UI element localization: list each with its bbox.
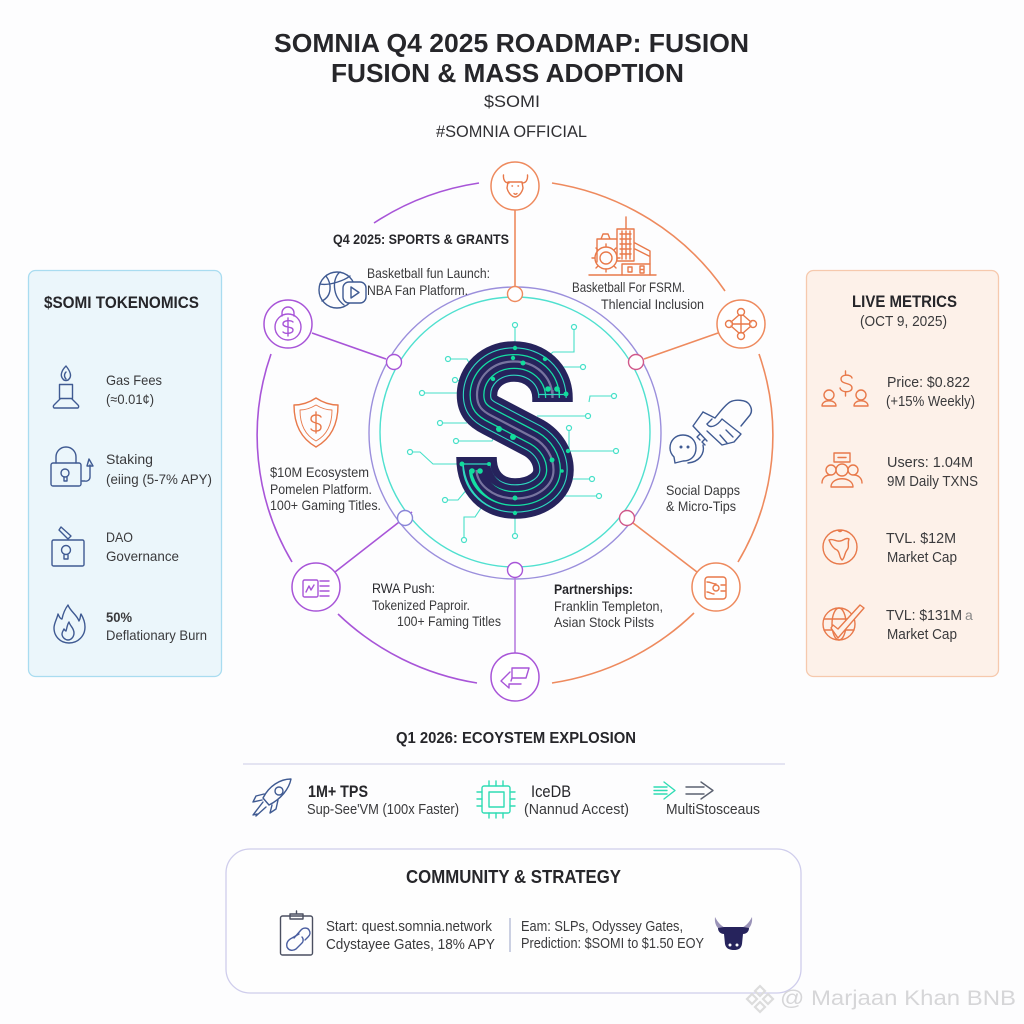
text: tvl: Market Cap bbox=[887, 549, 957, 566]
icon: users bbox=[822, 453, 862, 487]
text: ecosystem grant bbox=[270, 464, 381, 513]
icon: factory building bbox=[589, 217, 656, 275]
heading: q4 2025: Q4 2025: SPORTS & GRANTS bbox=[333, 231, 509, 247]
title: SOMNIA Q4 2025 ROADMAP: FUSION bbox=[274, 28, 749, 58]
central S logo with circuit traces bbox=[408, 322, 618, 542]
hub nodes bbox=[386, 286, 644, 578]
text: social dapps: & Micro-Tips bbox=[666, 498, 736, 514]
icon: teal arrow bbox=[654, 782, 675, 799]
connectors bbox=[312, 210, 718, 653]
title bbox=[274, 28, 749, 88]
node: server bbox=[692, 563, 740, 611]
circuit nodes bbox=[460, 346, 570, 515]
text: burn: 50% bbox=[106, 609, 133, 625]
text: price bbox=[886, 374, 975, 410]
inner hub ring bbox=[380, 297, 650, 567]
circuit pins bbox=[408, 322, 618, 542]
text: start: Start: quest.somnia.network bbox=[326, 918, 492, 935]
text: dao bbox=[106, 529, 179, 564]
text: ecosystem grant: Pomelen Platform. bbox=[270, 481, 372, 497]
text: basketball launch bbox=[367, 265, 490, 298]
icon: globe with check bbox=[823, 605, 864, 640]
text: earn: Eam: SLPs, Odyssey Gates, bbox=[521, 918, 683, 935]
node: arrow flag bbox=[491, 653, 539, 701]
watermark: @ Marjaan Khan BNB bbox=[780, 987, 1016, 1010]
text: multistream: MultiStosceaus bbox=[666, 801, 760, 818]
outer orbit arcs bbox=[257, 183, 773, 683]
node: bull bbox=[491, 162, 539, 210]
icon: globe bbox=[823, 530, 857, 564]
S shape bbox=[462, 362, 566, 498]
watermark bbox=[747, 986, 1016, 1012]
text: gas fees bbox=[106, 372, 162, 407]
text: ecosystem grant: 100+ Gaming Titles. bbox=[270, 497, 381, 513]
icon: gray arrow bbox=[686, 782, 713, 799]
text: burn: Deflationary Burn bbox=[106, 627, 207, 643]
text: rwa push: Tokenized Paproir. bbox=[372, 597, 470, 613]
divider bbox=[509, 918, 511, 952]
icon: gas burner bbox=[53, 366, 79, 408]
text: rwa push: 100+ Faming Titles bbox=[397, 613, 501, 629]
text: dao: DAO bbox=[106, 529, 133, 545]
text: icedb: (Nannud Accest) bbox=[524, 801, 629, 818]
icon: basketball with play bbox=[319, 272, 366, 308]
text: earn: Prediction: $SOMI to $1.50 EOY bbox=[521, 935, 704, 952]
icon: handshake and chat bbox=[670, 400, 751, 463]
text: price: (+15% Weekly) bbox=[886, 393, 975, 410]
heading: tokenomics: $SOMI TOKENOMICS bbox=[44, 293, 199, 312]
text: price: Price: $0.822 bbox=[887, 374, 970, 391]
heading: community: COMMUNITY & STRATEGY bbox=[406, 867, 621, 887]
text: tps: Sup-See'VM (100x Faster) bbox=[307, 801, 459, 818]
text: rwa push bbox=[372, 580, 501, 629]
text: staking: Staking bbox=[106, 451, 153, 467]
text: ecosystem grant: $10M Ecosystem bbox=[270, 464, 369, 480]
text: social dapps bbox=[666, 482, 740, 514]
hashtag subtitle: #SOMNIA OFFICIAL bbox=[436, 122, 587, 141]
icon: chip bbox=[477, 781, 515, 818]
text: basketball launch: NBA Fan Platform. bbox=[367, 282, 468, 298]
text: tvl bbox=[886, 530, 957, 566]
panel: live metrics bbox=[806, 270, 998, 676]
ticker subtitle: $SOMI bbox=[484, 92, 540, 111]
text: fsrm: Thlencial Inclusion bbox=[601, 296, 704, 312]
icon: shield bbox=[294, 398, 338, 447]
text: market cap: Market Cap bbox=[887, 626, 957, 643]
text: gas fees: Gas Fees bbox=[106, 372, 162, 388]
text: fsrm: Basketball For FSRM. bbox=[572, 279, 685, 295]
text: staking: (eiing (5-7% APY) bbox=[106, 471, 212, 487]
text: start: Cdystayee Gates, 18% APY bbox=[326, 936, 495, 953]
text: dao: Governance bbox=[106, 548, 179, 564]
text: market cap bbox=[886, 607, 973, 643]
text: partnerships: Asian Stock Pilsts bbox=[554, 614, 654, 630]
text: tvl: TVL. $12M bbox=[886, 530, 956, 547]
heading: live metrics: LIVE METRICS bbox=[852, 292, 957, 311]
icon: price people bbox=[822, 371, 868, 406]
text: market cap: TVL: $131M bbox=[886, 607, 962, 624]
text: start bbox=[326, 918, 495, 953]
panel: community and strategy bbox=[226, 849, 801, 993]
divider bbox=[243, 763, 785, 765]
text: icedb bbox=[524, 782, 629, 818]
text: tps bbox=[307, 782, 459, 818]
text: gas fees: (≈0.01¢) bbox=[106, 391, 154, 407]
text: basketball launch: Basketball fun Launch: bbox=[367, 265, 490, 281]
heading: live metrics bbox=[852, 292, 957, 330]
icon: dao ballot bbox=[52, 527, 84, 566]
text: partnerships: Franklin Templeton, bbox=[554, 598, 663, 614]
text: rwa push: RWA Push: bbox=[372, 580, 435, 596]
text: tps: 1M+ TPS bbox=[308, 782, 368, 801]
heading: q1 2026: Q1 2026: ECOYSTEM EXPLOSION bbox=[396, 730, 636, 747]
text: users bbox=[887, 454, 978, 490]
text: earn bbox=[521, 918, 704, 952]
node: lock bbox=[264, 300, 312, 348]
title: FUSION & MASS ADOPTION bbox=[331, 58, 684, 88]
text: fsrm bbox=[572, 279, 704, 312]
text: market cap: a bbox=[965, 607, 973, 623]
outer hub ring bbox=[369, 287, 661, 579]
text: partnerships bbox=[554, 581, 663, 630]
icon: staking lock bbox=[51, 447, 93, 486]
text: partnerships: Partnerships: bbox=[554, 581, 633, 597]
icon: flame bbox=[54, 605, 85, 643]
icon: bull head bbox=[715, 917, 752, 950]
text: users: 9M Daily TXNS bbox=[887, 473, 978, 490]
text: icedb: IceDB bbox=[531, 782, 571, 801]
panel: tokenomics bbox=[28, 270, 222, 676]
text: social dapps: Social Dapps bbox=[666, 482, 740, 498]
node: document chart bbox=[292, 563, 340, 611]
icon: rocket bbox=[253, 779, 291, 816]
icon: clipboard link bbox=[280, 911, 312, 955]
node: network bbox=[717, 300, 765, 348]
text: staking bbox=[106, 451, 212, 487]
text: users: Users: 1.04M bbox=[887, 454, 973, 471]
text: burn bbox=[106, 609, 207, 643]
heading: live metrics: (OCT 9, 2025) bbox=[860, 313, 947, 330]
